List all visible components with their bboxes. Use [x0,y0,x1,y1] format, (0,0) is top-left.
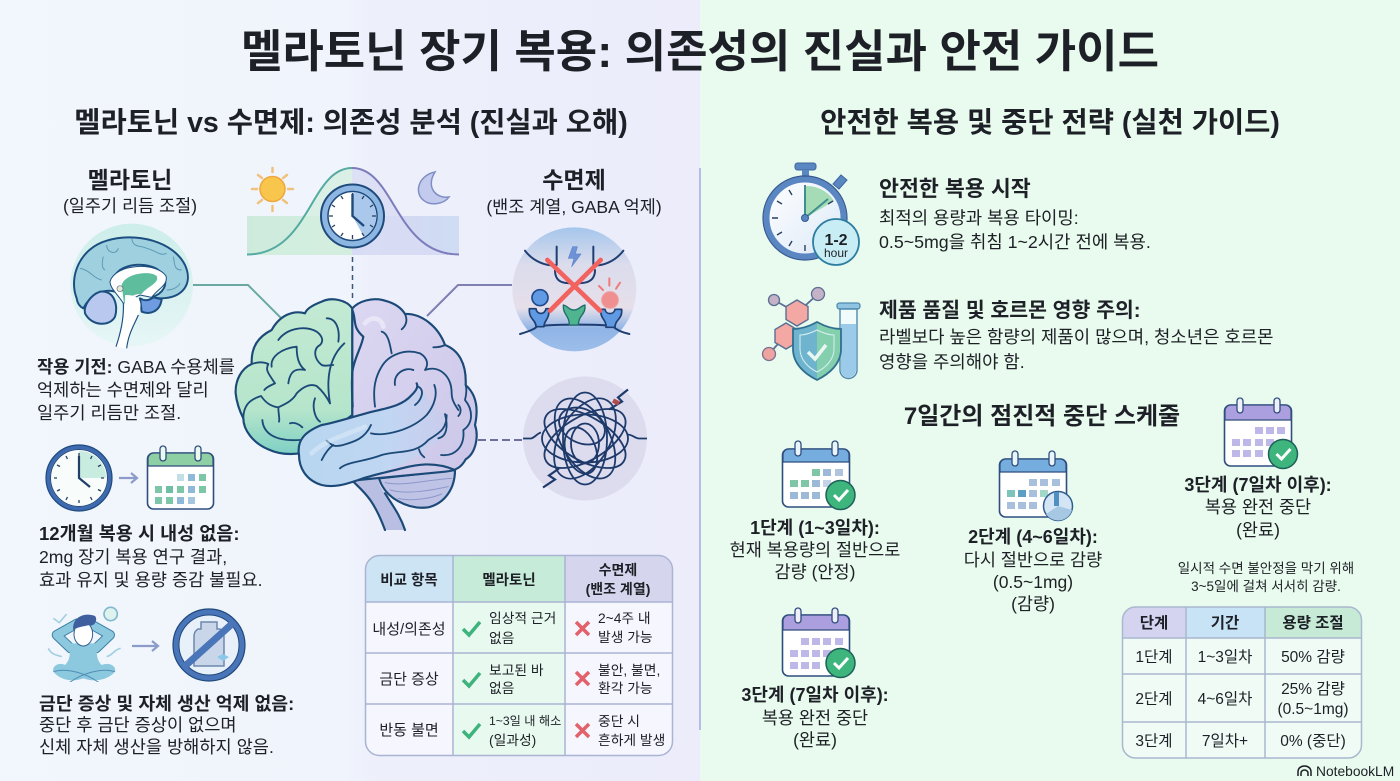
right section heading: 안전한 복용 및 중단 전략 (실천 가이드) [820,107,1280,139]
panel: melatonin vs sleeping pills [37,107,672,757]
icon: sun [252,168,293,211]
text block: quality caution: 라벨보다 높은 함량의 제품이 많으며, 청소년은 호르몬 [879,327,1273,347]
icon: clock [321,184,384,248]
row: step 2: 2단계 [1135,690,1173,708]
row: step 2 [1135,680,1349,718]
text block: quality caution: 영향을 주의해야 함. [879,352,1025,372]
note: gradual taper [1178,561,1354,594]
step 3 right [1184,398,1332,540]
row: step 3 [1135,732,1346,750]
text block: mechanism: 일주기 리듬만 조절. [37,403,181,423]
row: withdrawal [379,663,660,696]
row: step 2: 4~6일차 [1198,690,1252,708]
row: withdrawal: 금단 증상 [379,671,439,688]
row: rebound insomnia: 1~3일 내 해소 [489,714,561,728]
step 1: 1단계 (1~3일차): [750,518,880,538]
row: step 2: 25% 감량 [1281,680,1345,698]
connector: brain diagram to brain [192,285,281,318]
header row: (밴조 계열) [586,581,650,597]
icon: moon [418,172,449,204]
icon: relaxed person to no pills [48,607,245,683]
badge: 1-2 hour [813,219,859,265]
text block: no tolerance at 12 months: 2mg 장기 복용 연구 결과, [39,547,227,567]
table: dose schedule [1122,607,1362,758]
step 2: (감량) [1011,594,1055,614]
text block: mechanism [37,357,235,423]
step 2 [964,451,1102,614]
row: tolerance: 발생 가능 [598,630,653,645]
row: tolerance: 없음 [489,631,514,646]
step 3 left: 3단계 (7일차 이후): [741,685,889,705]
step 3 right: 복용 완전 중단 [1205,497,1311,517]
header row [1140,614,1344,632]
badge: 1-2 hour: hour [824,246,848,260]
text block: no withdrawal [39,693,294,757]
badge: 1-2 hour: 1-2 [824,232,848,249]
row: withdrawal: 불안, 불면, [598,663,660,678]
icon: calendar green [148,446,214,509]
icon: molecule, shield and test tube [762,288,860,380]
text block: no tolerance at 12 months [39,523,263,590]
background: left panel [0,0,702,781]
row: rebound insomnia: 흔하게 발생 [598,733,665,748]
melatonin heading: (일주기 리듬 조절) [63,196,197,216]
text block: no tolerance at 12 months: 12개월 복용 시 내성 없음: [39,523,239,544]
heading: 7-day schedule: 7일간의 점진적 중단 스케줄 [904,403,1180,430]
text block: no withdrawal: 금단 증상 및 자체 생산 억제 없음: [39,693,294,714]
step 3 left: (완료) [793,730,837,750]
note: gradual taper: 3~5일에 걸쳐 서서히 감량. [1191,579,1341,594]
step 2: (0.5~1mg) [993,572,1073,592]
text block: no tolerance at 12 months: 효과 유지 및 용량 증감 불필요. [39,570,263,590]
row: step 1: 1~3일차 [1198,648,1252,666]
icon: wall clock [46,445,112,511]
step 1: 현재 복용량의 절반으로 [730,540,900,560]
icon: no pill bottle [173,609,245,681]
connector: receptor to brain [427,285,512,316]
icon: calendar with pie [1000,451,1072,520]
icon: clock to calendar [46,445,214,511]
row: step 1 [1135,648,1345,666]
icon: calendar blue check [782,441,855,510]
step 2: 2단계 (4~6일차): [968,527,1098,547]
step 1: 감량 (안정) [775,562,855,582]
connector: tangle to brain [478,439,526,441]
row: step 1: 50% 감량 [1281,648,1345,666]
row: step 3: 3단계 [1135,732,1173,750]
icon: stopwatch [763,163,859,265]
row: withdrawal: 보고된 바 [489,663,544,678]
row: tolerance: 임상적 근거 [489,611,556,626]
header row: 비교 항목 [380,572,438,589]
header row: 단계 [1140,614,1168,632]
step 3 right: 3단계 (7일차 이후): [1184,475,1332,495]
step 1 [730,441,900,582]
row: withdrawal: 환각 가능 [598,681,653,696]
step 3 right: (완료) [1236,520,1280,540]
header row: 기간 [1211,614,1239,632]
text block: safe start: 안전한 복용 시작 [879,176,1031,201]
icon: tangled knot [523,376,647,500]
step 2: 다시 절반으로 감량 [964,550,1102,570]
text block: safe start [879,176,1151,252]
row: step 1: 1단계 [1135,648,1173,666]
icon: calendar purple check [782,608,855,678]
icon: calendar purple check [1224,398,1298,468]
text block: mechanism: 작용 기전: GABA 수용체를 [37,357,235,377]
icon: brain sagittal section [70,224,193,348]
row: rebound insomnia: (일과성) [489,733,536,748]
table: comparison [366,556,672,756]
row: tolerance: 내성/의존성 [372,621,446,638]
icon: large brain [236,299,477,530]
row: tolerance: 2~4주 내 [598,611,651,626]
header row: 용량 조절 [1282,614,1344,632]
text block: quality caution [879,299,1273,372]
sleeping pill heading [486,167,662,217]
row: rebound insomnia: 중단 시 [598,714,640,729]
center divider [699,168,701,730]
melatonin heading: 멜라토닌 [88,167,172,193]
row: rebound insomnia: 반동 불면 [379,722,439,739]
text block: no withdrawal: 신체 자체 생산을 방해하지 않음. [39,737,274,757]
step 3 left [741,608,889,750]
icon: receptor blocked [512,227,636,351]
logo: NotebookLM: NotebookLM [1316,764,1394,779]
connector: clock to brain [352,257,354,300]
text block: quality caution: 제품 품질 및 호르몬 영향 주의: [879,299,1141,322]
row: rebound insomnia [379,714,665,748]
header row: 수면제 [599,562,637,578]
circadian rhythm chart [247,168,459,255]
background: right panel [700,0,1400,781]
sleeping pill heading: 수면제 [542,167,606,193]
panel: safe use and stopping strategy [730,107,1362,758]
note: gradual taper: 일시적 수면 불안정을 막기 위해 [1178,561,1354,576]
header row [380,562,650,597]
text block: no withdrawal: 중단 후 금단 증상이 없으며 [39,715,237,735]
row: step 3: 0% (중단) [1280,732,1346,750]
sleeping pill heading: (밴조 계열, GABA 억제) [486,197,662,217]
left section heading: 멜라토닌 vs 수면제: 의존성 분석 (진실과 오해) [74,107,628,139]
row: step 3: 7일차+ [1202,732,1248,750]
row: step 2: (0.5~1mg) [1277,701,1349,718]
arrow [132,641,158,651]
row: withdrawal: 없음 [489,681,514,696]
arrow [119,473,137,483]
melatonin heading [63,167,197,216]
header row: 멜라토닌 [482,572,536,589]
text block: safe start: 0.5~5mg을 취침 1~2시간 전에 복용. [879,232,1151,252]
step 3 left: 복용 완전 중단 [762,708,868,728]
row: tolerance [372,611,653,646]
icon: relaxed person [48,607,121,683]
text block: mechanism: 억제하는 수면제와 달리 [37,380,209,400]
text block: safe start: 최적의 용량과 복용 타이밍: [879,208,1079,228]
title: 멜라토닌 장기 복용: 의존성의 진실과 안전 가이드 [241,26,1159,77]
